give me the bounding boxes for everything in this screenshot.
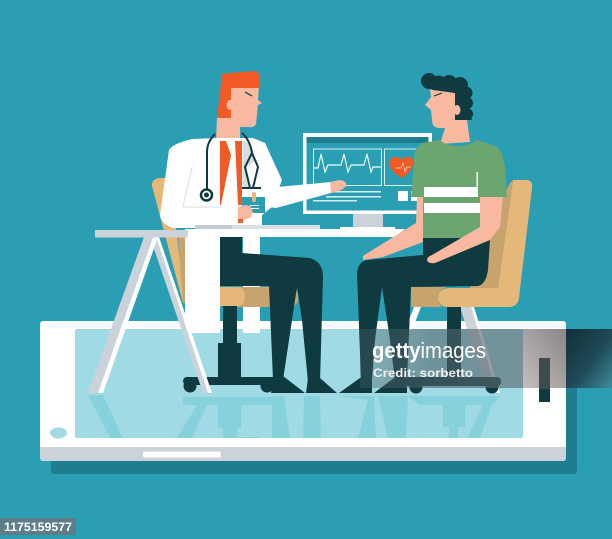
shirt stripes <box>424 187 478 197</box>
screen reflection <box>88 395 500 438</box>
patient chair <box>405 180 532 394</box>
watermark text: credit: Credit: sorbetto <box>373 366 473 380</box>
shirt and tie <box>220 141 231 205</box>
ECG panel <box>314 149 382 186</box>
doctor chair <box>152 178 298 392</box>
coat back panel <box>243 232 260 333</box>
home bar <box>143 452 221 458</box>
camera dot <box>50 428 67 438</box>
icon: heart <box>389 157 413 178</box>
tablet device <box>40 321 577 474</box>
desk <box>88 225 405 393</box>
doctor arm and badge <box>238 160 346 223</box>
image id badge <box>0 518 76 535</box>
watermark band <box>360 329 612 402</box>
coat front panel <box>185 230 220 333</box>
doctor head and neck <box>216 86 262 142</box>
doctor trousers <box>220 236 323 382</box>
patient arms <box>363 197 423 260</box>
patient <box>339 73 507 393</box>
monitor stand <box>353 214 383 227</box>
patient trousers <box>357 237 490 380</box>
doctor <box>160 71 337 393</box>
monitor <box>303 133 432 230</box>
text lines <box>326 191 381 192</box>
doctor hands <box>238 205 253 222</box>
patient neck and face <box>425 88 470 144</box>
doctor coat <box>160 138 282 228</box>
watermark text: gettyimages: gettyimages <box>372 338 486 363</box>
coat lapel line <box>183 167 220 207</box>
image id badge: 1175159577 <box>4 522 72 534</box>
heart panel <box>384 149 420 186</box>
ID badge <box>242 197 265 213</box>
doctor hair <box>217 71 260 118</box>
patient hair <box>421 73 473 120</box>
stethoscope <box>207 133 261 190</box>
side button <box>539 358 550 402</box>
green shirt <box>411 140 507 238</box>
